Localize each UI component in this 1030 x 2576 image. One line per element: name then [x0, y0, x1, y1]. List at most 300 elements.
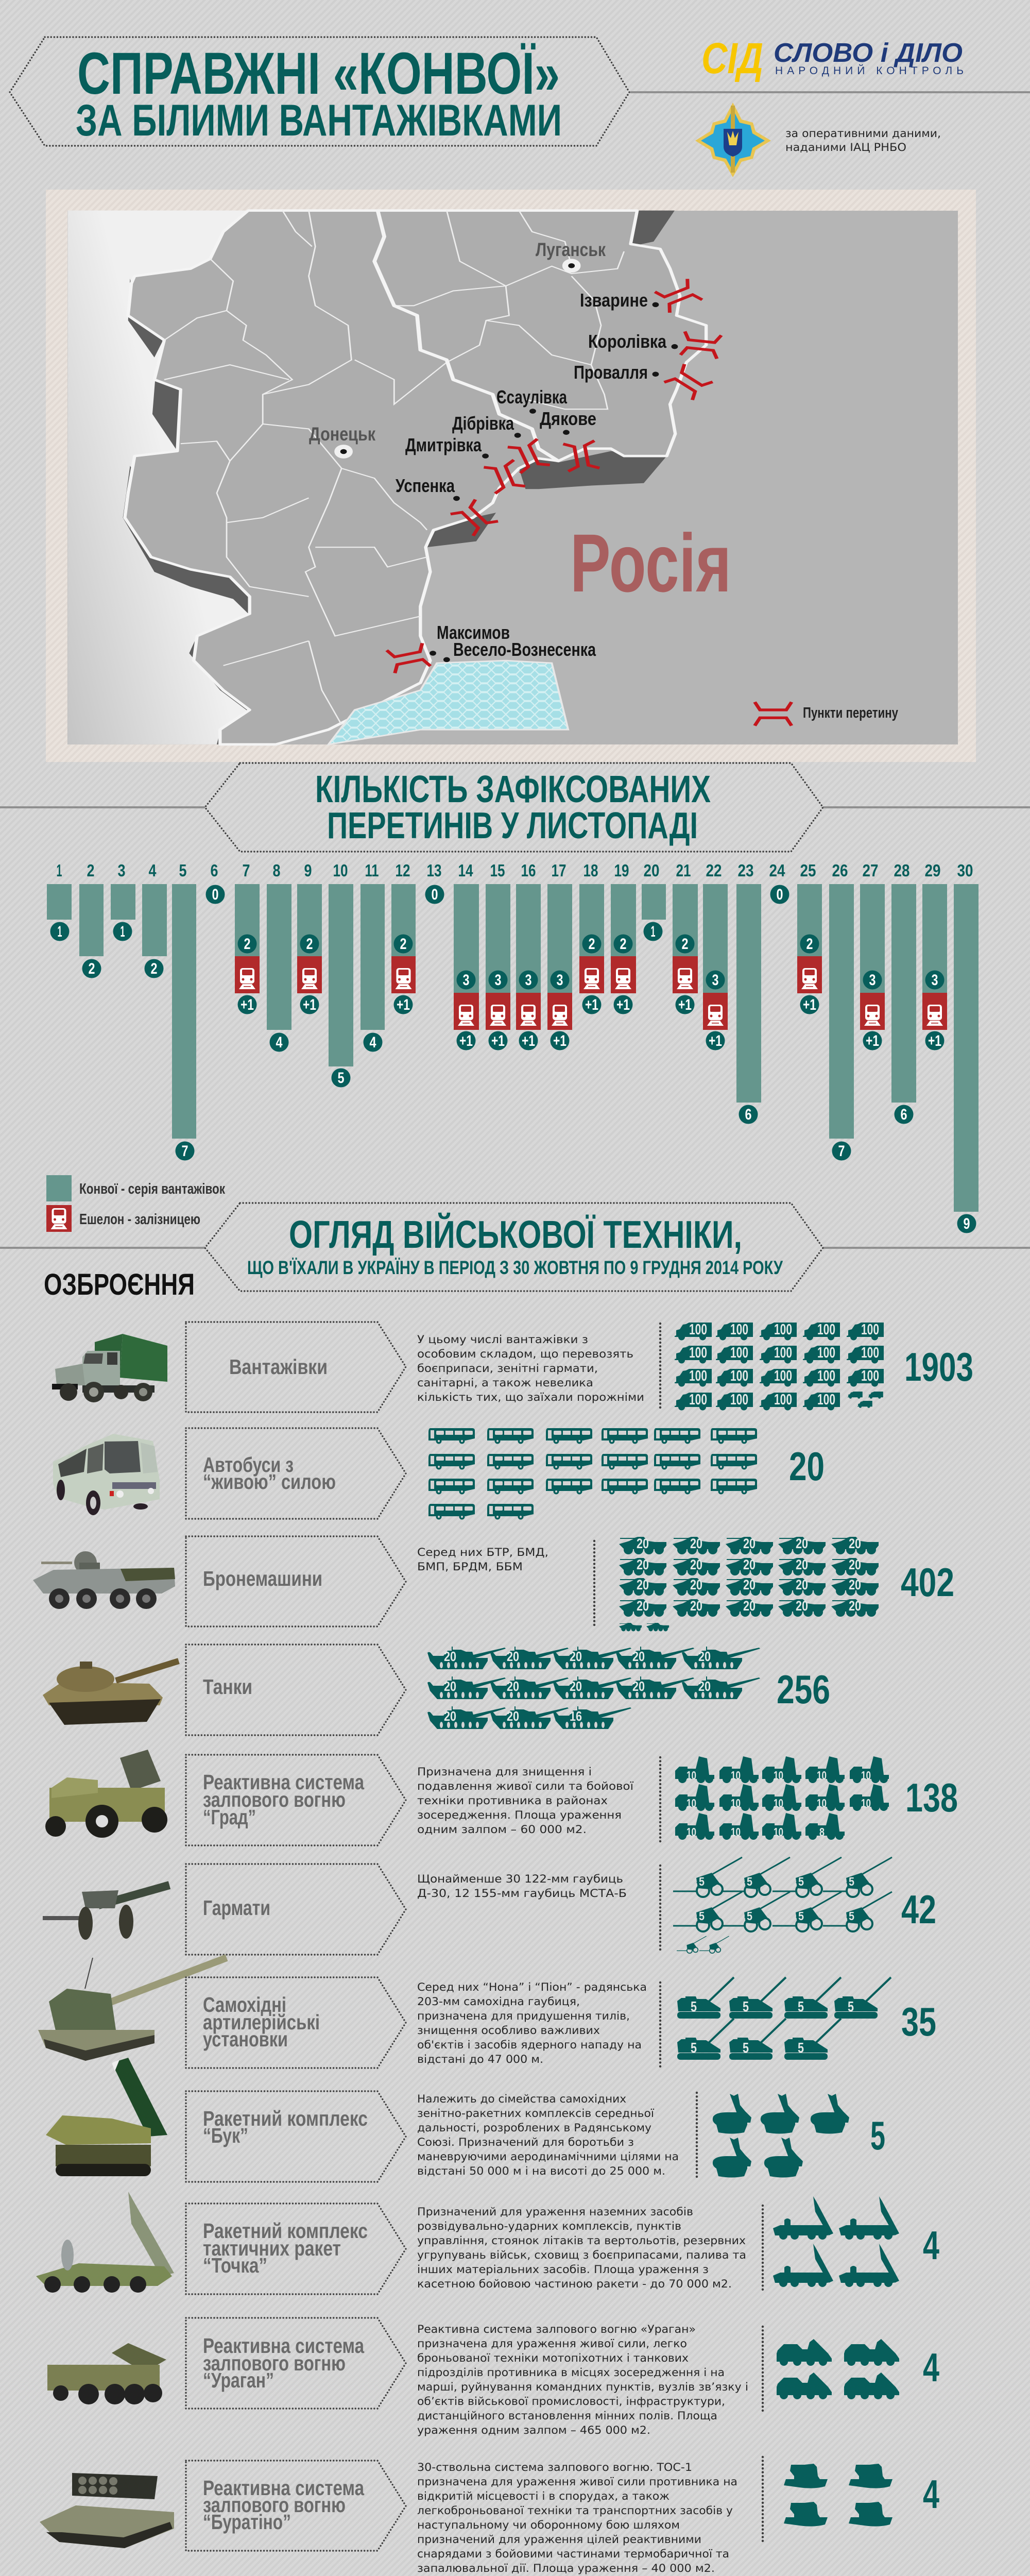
value badges: 2 [306, 936, 313, 953]
description: Uragan: марші, руйнування командних пунктів, вузлів зв’язку і [417, 2381, 748, 2393]
chevron: Точка: “Точка” [203, 2253, 267, 2277]
chevron: Точка [186, 2204, 406, 2294]
map labels: Провалля [574, 362, 648, 383]
icons: armored vehicles: 20 [849, 1598, 861, 1614]
icons: trucks: 100 [817, 1345, 835, 1361]
value badges: 9 [963, 1215, 970, 1232]
value badges: 2 [89, 960, 95, 977]
description: Buratino: відкритій місцевості і в спорудах, а також [417, 2490, 670, 2502]
chevron: Самохідні: артилерійські [203, 2010, 320, 2034]
day labels: 9 [304, 861, 312, 880]
heading: crossings in November: КІЛЬКІСТЬ ЗАФІКСОВАНИХ [315, 768, 711, 810]
map labels: Королівка [588, 331, 667, 352]
day labels: 10 [333, 861, 348, 880]
day labels: 7 [242, 861, 250, 880]
panel: tanks [43, 1645, 830, 1735]
chart legend: Конвої - серія вантажівок [79, 1181, 225, 1197]
description: Uragan: ураження одним залпом – 465 000 м2. [417, 2424, 650, 2436]
description: self-propelled artillery: Серед них “Нона” і “Піон” - радянська [417, 1981, 647, 1993]
description: Buk: відстані 50 000 м і на висоті до 25 000 м. [417, 2165, 665, 2177]
day labels: 30 [957, 861, 973, 880]
icons: trucks: 100 [689, 1368, 707, 1384]
icons: Grad: 10 [774, 1769, 783, 1782]
icons: Buratino [784, 2464, 892, 2527]
value badges: +1 [241, 996, 254, 1013]
icons: tanks: 20 [698, 1679, 711, 1694]
value badges: 1 [58, 923, 62, 940]
description: Uragan: об’єктів військової промисловості, інфраструктури, [417, 2395, 725, 2408]
convoy bars [47, 884, 978, 1212]
description: Buratino: запалювальної дії. Площа ураження – 40 000 м2. [417, 2562, 715, 2574]
count: 20: 20 [789, 1444, 825, 1489]
panel: trucks [52, 1321, 973, 1412]
icons: armored vehicles: 20 [743, 1557, 756, 1572]
count: 4: 4 [923, 2223, 939, 2268]
value badges: +1 [616, 996, 630, 1013]
map labels: Весело-Вознесенка [453, 639, 596, 660]
value badges: 3 [462, 972, 470, 989]
icons: armored vehicles: 20 [690, 1577, 702, 1592]
description: self-propelled artillery: 203-мм самохідна гаубиця, [417, 1995, 580, 2008]
heading: weapons: ОЗБРОЄННЯ [44, 1268, 195, 1301]
chevron: Точка: Ракетний комплекс [203, 2219, 368, 2243]
icons: Grad: 10 [686, 1825, 696, 1839]
description: trucks: боєприпаси, зенітні гармати, [417, 1362, 598, 1375]
description: guns: Щонайменше 30 122-мм гаубиць [417, 1873, 623, 1885]
source note [785, 127, 941, 154]
day labels: 24 [769, 861, 785, 880]
count: 256: 256 [777, 1667, 830, 1712]
icons: armored vehicles: 20 [796, 1536, 808, 1551]
chevron: Ураган [186, 2318, 406, 2409]
photo: truck [52, 1334, 167, 1402]
heading: overview of military equipment [205, 1203, 823, 1291]
value badges: 7 [181, 1143, 188, 1160]
map labels: Максимов [437, 622, 510, 643]
icons: armored vehicles: 20 [796, 1598, 808, 1614]
value badges: +1 [522, 1032, 535, 1049]
description: Grad: одним залпом – 60 000 м2. [417, 1823, 587, 1836]
chevron: Бук: Ракетний комплекс [203, 2107, 368, 2130]
day labels: 5 [179, 861, 186, 880]
description: Grad: подавлення живої сили та бойової [417, 1780, 633, 1792]
icons: trucks: 100 [689, 1345, 707, 1361]
icons: armored vehicles: 20 [849, 1536, 861, 1551]
chevron: Ураган: “Ураган” [203, 2368, 274, 2392]
value badges: 2 [588, 936, 595, 953]
description: Uragan: броньованої техніки мотопіхотних і танкових [417, 2352, 689, 2364]
icons: armored vehicles [619, 1536, 879, 1631]
icons: Grad [675, 1756, 889, 1840]
map shapes [67, 211, 792, 744]
description: Buk: дальності, розроблених в Радянському [417, 2122, 651, 2134]
day labels: 19 [614, 861, 629, 880]
count: 5: 5 [870, 2113, 885, 2158]
panel: self-propelled artillery [38, 1958, 936, 2068]
value badges: 3 [525, 972, 531, 989]
icons: trucks: 100 [730, 1345, 748, 1361]
icons: trucks: 100 [861, 1345, 879, 1361]
day labels: 22 [706, 861, 722, 880]
day labels: 17 [551, 861, 566, 880]
value badges: 1 [651, 923, 655, 940]
icons: armored vehicles: 20 [690, 1598, 702, 1614]
icons: trucks: 100 [861, 1368, 879, 1384]
panel: Grad [45, 1750, 958, 1845]
icons: Grad: 10 [817, 1797, 827, 1810]
icons: self-propelled guns: 5 [691, 1998, 697, 2014]
source note: за оперативними даними, [785, 127, 941, 140]
icons: armored vehicles: 20 [637, 1536, 649, 1551]
icons: trucks: 100 [817, 1321, 835, 1338]
chart legend: Ешелон - залізницею [79, 1211, 200, 1228]
panel: Tochka [36, 2192, 939, 2294]
icons: tanks: 20 [632, 1649, 645, 1664]
map labels [309, 239, 898, 721]
icons: tanks: 20 [507, 1708, 519, 1724]
description: Buratino: наступальному чи оборонному бою шляхом [417, 2519, 680, 2531]
value badges: 0 [432, 886, 438, 903]
icons: tanks [427, 1647, 760, 1729]
icons: self-propelled guns: 5 [798, 1998, 804, 2014]
chevron: Ураган: залпового вогню [203, 2351, 346, 2375]
chevron: Град: “Град” [203, 1805, 256, 1829]
description: Buratino: призначена для ураження живої сили противника на [417, 2476, 737, 2488]
icons: armored vehicles: 20 [849, 1577, 861, 1592]
chevron: Автобуси: “живою” силою [203, 1470, 336, 1494]
description: Buk: Належить до сімейства самохідних [417, 2093, 626, 2105]
icons: self-propelled guns: 5 [743, 1998, 749, 2014]
photo: Uragan launcher [47, 2343, 166, 2404]
day labels: 1 [57, 861, 62, 880]
panel: Buk [46, 2058, 885, 2182]
chevron: Самохідні: Самохідні [203, 1993, 286, 2016]
icons: tanks: 16 [570, 1708, 582, 1724]
chevron: Ураган: Реактивна система [203, 2334, 365, 2358]
panel: buses [53, 1428, 825, 1520]
value badges: 3 [494, 972, 502, 989]
value badges: +1 [803, 996, 816, 1013]
photo: tank [43, 1661, 179, 1725]
photo: armored vehicle [33, 1551, 175, 1609]
title [10, 37, 629, 146]
icons: tanks: 20 [444, 1708, 456, 1724]
chevron: Автобуси [186, 1428, 406, 1519]
description: trucks: кількість тих, що заїхали порожніми [417, 1391, 644, 1403]
count: 4: 4 [923, 2471, 939, 2517]
description: self-propelled artillery: об'єктів і засобів ядерного нападу на [417, 2039, 642, 2051]
description: guns: Д-30, 12 155-мм гаубиць МСТА-Б [417, 1887, 627, 1900]
value badges: +1 [553, 1032, 566, 1049]
icons: Uragan [777, 2339, 899, 2399]
description: trucks: санітарні, а також невелика [417, 1377, 593, 1389]
value badges: +1 [459, 1032, 473, 1049]
chevron: Буратіно: Реактивна система [203, 2476, 365, 2500]
logo: Слово і діло: СІД [701, 34, 763, 82]
chevron: Бук [186, 2091, 406, 2182]
value badges: 2 [682, 936, 688, 953]
icons: guns: 5 [699, 1875, 705, 1888]
icon: emblem of the NSDC [695, 103, 771, 177]
icons: Grad: 10 [686, 1769, 696, 1782]
icons: trucks: 100 [817, 1368, 835, 1384]
icons: Buk [713, 2094, 849, 2177]
chevron: Бук: “Бук” [203, 2124, 248, 2147]
icons: armored vehicles: 20 [743, 1577, 756, 1592]
description: trucks [417, 1333, 644, 1403]
day labels: 13 [426, 861, 442, 880]
day labels: 2 [87, 861, 95, 880]
icons: tanks: 20 [507, 1649, 519, 1664]
heading: crossings in November: ПЕРЕТИНІВ У ЛИСТОПАДІ [327, 805, 698, 846]
day labels: 14 [458, 861, 473, 880]
icons: guns: 5 [747, 1875, 752, 1888]
panel: map [46, 190, 976, 762]
icons: Grad: 10 [731, 1797, 741, 1810]
value badges: +1 [866, 1032, 879, 1049]
logo: Слово і діло: НАРОДНИЙ КОНТРОЛЬ [775, 64, 964, 77]
icons: Grad: 10 [774, 1797, 783, 1810]
icons: Grad: 10 [686, 1797, 696, 1810]
description: self-propelled artillery: знищення особливо важливих [417, 2024, 600, 2037]
description: Buk: зенітно-ракетних комплексів середньої [417, 2107, 654, 2120]
day labels: 26 [832, 861, 848, 880]
icons: armored vehicles: 20 [796, 1577, 808, 1592]
icons: self-propelled guns: 5 [743, 2040, 749, 2056]
panel: Buratino [40, 2457, 939, 2574]
icons: guns: 5 [798, 1909, 804, 1923]
chevron: Бронемашини [186, 1536, 406, 1626]
icons: self-propelled guns: 5 [691, 2040, 697, 2056]
value badges: 7 [838, 1143, 845, 1160]
icons: Tochka [773, 2196, 899, 2287]
description: Uragan [417, 2323, 748, 2436]
day labels: 23 [737, 861, 754, 880]
heading: overview of military equipment: ОГЛЯД ВІЙСЬКОВОЇ ТЕХНІКИ, [289, 1213, 742, 1256]
description: Tochka [417, 2206, 746, 2290]
description: Buratino: 30-ствольна система залпового вогню. ТОС-1 [417, 2461, 692, 2473]
description: Buratino: призначений для ураження цілей реактивними [417, 2533, 701, 2546]
description: Uragan: підрозділів противника в місцях зосередження і на [417, 2366, 725, 2379]
value badges: 2 [150, 960, 158, 977]
map labels: Дібрівка [452, 413, 514, 434]
description: Buk: Союзі. Призначений для боротьби з [417, 2136, 634, 2148]
icons: armored vehicles: 20 [743, 1536, 756, 1551]
value badges: +1 [678, 996, 692, 1013]
day labels: 25 [800, 861, 816, 880]
icons: guns: 5 [798, 1875, 804, 1888]
description: Buk: маневруючими аеродинамічними цілями на [417, 2150, 679, 2163]
icons: Grad: 10 [731, 1825, 741, 1839]
icons: Grad: 10 [861, 1769, 871, 1782]
map labels: Дякове [540, 408, 596, 429]
icons: Grad: 10 [817, 1769, 827, 1782]
logo: Слово і діло: СЛОВО і ДІЛО [774, 38, 963, 68]
icons: tanks: 20 [570, 1649, 582, 1664]
icons: armored vehicles: 20 [690, 1557, 702, 1572]
description: Grad: Призначена для знищення і [417, 1766, 592, 1778]
day labels: 15 [490, 861, 505, 880]
map labels: Донецьк [309, 423, 375, 445]
chevron: Танки [186, 1645, 406, 1735]
icons: armored vehicles: 20 [849, 1557, 861, 1572]
icons: trucks: 100 [774, 1392, 792, 1408]
icons: trucks: 100 [774, 1368, 792, 1384]
value badges: +1 [491, 1032, 505, 1049]
day labels: 20 [644, 861, 659, 880]
value badges: 3 [869, 972, 876, 989]
day labels: 11 [365, 861, 379, 880]
map labels: Пункти перетину [803, 705, 898, 721]
heading: overview of military equipment: ЩО В'ЇХАЛИ В УКРАЇНУ В ПЕРІОД З 30 ЖОВТНЯ ПО 9 ГРУДНЯ 2014 РОКУ [247, 1257, 783, 1278]
bar chart: crossings per day [47, 861, 978, 1233]
value badges: +1 [397, 996, 410, 1013]
icons: trucks: 100 [730, 1321, 748, 1338]
value badges [50, 885, 976, 1233]
icons: Grad: 10 [731, 1769, 741, 1782]
icons: self-propelled guns [677, 1977, 891, 2060]
icons: trucks: 100 [689, 1392, 707, 1408]
day labels: 18 [583, 861, 598, 880]
value badges: 3 [556, 972, 563, 989]
icons: guns [673, 1857, 892, 1953]
panel: guns [43, 1857, 936, 1955]
day labels: 12 [396, 861, 410, 880]
description: Buratino: легкоброньованої техніки та транспортних засобів у [417, 2504, 733, 2517]
description: self-propelled artillery: відстані до 47 000 м. [417, 2053, 543, 2065]
chevron: Автобуси: Автобуси з [203, 1453, 294, 1477]
description: Tochka: управління, стоянок літаків та вертольотів, резервних [417, 2234, 746, 2247]
icons: trucks: 100 [861, 1321, 879, 1338]
description: armored vehicles [417, 1546, 548, 1573]
icons: armored vehicles: 20 [743, 1598, 756, 1614]
value badges: +1 [709, 1032, 722, 1049]
icons: Grad: 10 [861, 1797, 871, 1810]
icons: trucks [675, 1321, 884, 1411]
description: Grad: зосередження. Площа ураження [417, 1809, 622, 1821]
source note: наданими ІАЦ РНБО [785, 141, 906, 154]
chevron: Танки: Танки [203, 1675, 252, 1699]
description: self-propelled artillery [417, 1981, 647, 2065]
chevron: Буратіно [186, 2461, 406, 2551]
map labels: Успенка [396, 475, 455, 496]
description: Tochka: касетною бойовою частиною ракети - до 70 000 м2. [417, 2278, 732, 2290]
panel: Uragan [47, 2318, 939, 2436]
day labels: 8 [273, 861, 280, 880]
value badges: +1 [928, 1032, 941, 1049]
icons: tanks: 20 [444, 1649, 456, 1664]
photo: bus [53, 1434, 160, 1515]
train icons [239, 968, 943, 1026]
chevron: Вантажівки: Вантажівки [229, 1355, 328, 1379]
photo: Grad launcher [45, 1750, 167, 1838]
count: 402: 402 [901, 1560, 954, 1605]
day labels: 21 [676, 861, 691, 880]
icons: armored vehicles: 20 [796, 1557, 808, 1572]
icons: trucks: 100 [730, 1368, 748, 1384]
photo: Buk launcher [46, 2058, 167, 2176]
train bars [235, 956, 947, 1030]
icons: trucks: 100 [817, 1392, 835, 1408]
map labels: Луганськ [536, 239, 606, 260]
day labels: 28 [894, 861, 909, 880]
chevron: Вантажівки [186, 1322, 406, 1412]
icons: self-propelled guns: 5 [798, 2040, 804, 2056]
chevron: Бронемашини: Бронемашини [203, 1567, 322, 1590]
count: 1903: 1903 [904, 1344, 973, 1389]
count: 4: 4 [923, 2345, 939, 2390]
value badges: 4 [370, 1034, 376, 1051]
description: trucks: У цьому числі вантажівки з [417, 1333, 588, 1346]
description: Tochka: Призначений для ураження наземних засобів [417, 2206, 693, 2218]
count: 138: 138 [905, 1775, 958, 1820]
icons: trucks: 100 [774, 1321, 792, 1338]
icons: tanks: 20 [632, 1679, 645, 1694]
icons: trucks: 100 [689, 1321, 707, 1338]
description: armored vehicles: Серед них БТР, БМД, [417, 1546, 548, 1558]
chevron: Гармати: Гармати [203, 1896, 270, 1920]
chevron: Самохідні [186, 1977, 406, 2068]
description: Tochka: угрупувань військ, сховищ з боєприпасами, палива та [417, 2249, 746, 2261]
photo: howitzer [43, 1885, 169, 1940]
chevron: Град: залпового вогню [203, 1788, 346, 1811]
count: 35: 35 [901, 1999, 936, 2044]
panel: armored vehicles [33, 1536, 954, 1631]
icons: tanks: 20 [698, 1649, 711, 1664]
photo: Tochka launcher [36, 2192, 174, 2293]
icons: tanks: 20 [570, 1679, 582, 1694]
value badges: 5 [338, 1070, 344, 1087]
title: СПРАВЖНІ «КОНВОЇ» [77, 41, 560, 107]
value badges: 3 [931, 972, 938, 989]
map labels: Росія [570, 517, 731, 609]
icons: Grad: 10 [774, 1825, 783, 1839]
title: ЗА БІЛИМИ ВАНТАЖІВКАМИ [76, 96, 562, 145]
value badges: +1 [303, 996, 316, 1013]
day labels: 6 [210, 861, 218, 880]
value badges: 2 [244, 936, 250, 953]
icons: guns: 5 [849, 1875, 854, 1888]
description: armored vehicles: БМП, БРДМ, ББМ [417, 1561, 523, 1573]
day labels: 27 [862, 861, 879, 880]
description: Tochka: інших матеріальних засобів. Площа ураження з [417, 2263, 709, 2276]
description: Uragan: Реактивна система залпового вогню «Ураган» [417, 2323, 696, 2335]
day labels [57, 861, 973, 880]
chevron: Град: Реактивна система [203, 1770, 365, 1794]
description: trucks: особовим складом, що перевозять [417, 1348, 633, 1360]
map labels: Єсаулівка [496, 386, 568, 408]
value badges: 2 [806, 936, 813, 953]
day labels: 4 [148, 861, 157, 880]
chevron: Буратіно: залпового вогню [203, 2493, 346, 2517]
value badges: 1 [121, 923, 125, 940]
icons: armored vehicles: 20 [690, 1536, 702, 1551]
photo: self-propelled gun [38, 1958, 227, 2061]
heading: crossings in November [205, 763, 823, 852]
value badges: 6 [900, 1106, 907, 1123]
description: Buratino: снарядами з бойовими частинами термобаричної та [417, 2548, 729, 2560]
chevron: Самохідні: установки [203, 2027, 288, 2051]
photo: TOS-1 launcher [40, 2473, 174, 2548]
logo: Слово і діло [701, 34, 964, 82]
description: Uragan: дистанційного встановлення мінних полів. Площа [417, 2410, 717, 2422]
icons: trucks: 100 [730, 1392, 748, 1408]
chevron: Гармати [186, 1864, 406, 1955]
icons: armored vehicles: 20 [637, 1598, 649, 1614]
value badges: 6 [745, 1106, 752, 1123]
day labels: 16 [521, 861, 536, 880]
description: Uragan: призначена для ураження живої сили, легко [417, 2337, 687, 2350]
